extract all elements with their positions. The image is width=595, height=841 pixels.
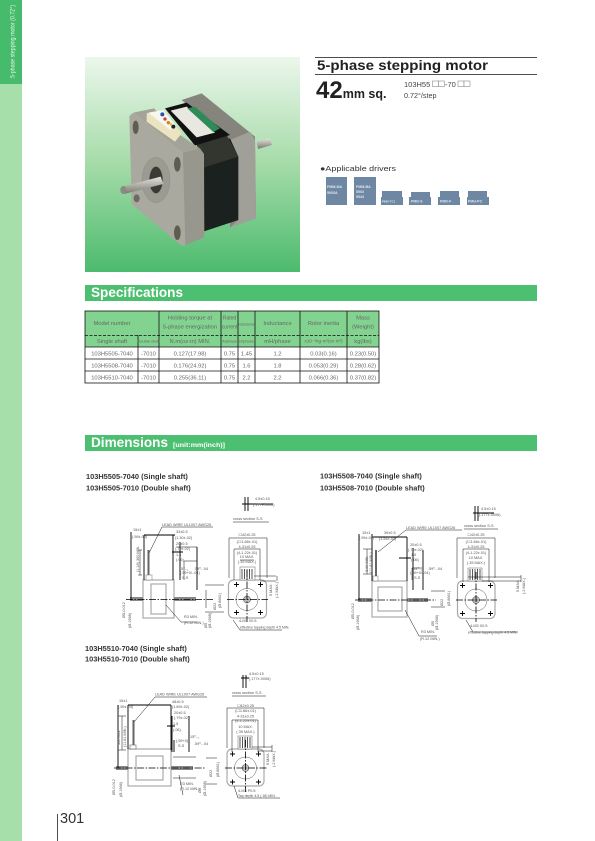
drawing: 103H5510 [112,672,280,798]
drawing: 103H5505: (.79±.02) [175,547,191,551]
model heading: 103H5508: 103H5508-7040 (Single shaft) [320,472,422,480]
front view: (4-1.22±.01) [235,719,257,723]
driver icons: PMD-S [411,200,423,204]
drawing: 103H5508: S-S [414,576,421,580]
specifications table: mH/phase [264,339,291,345]
drawing: 103H5505: (Ø.8661) [218,592,222,608]
drawing: 103H5508 [351,506,526,641]
drawing: 103H5508: (11.81 MIN.) [369,551,373,573]
front view: (.39 MAX.) [238,560,257,564]
driver icons: PMD-TC1 [382,200,396,204]
specifications table: 0.75 [224,376,235,382]
drawing: 103H5510: 15±1 [119,699,127,703]
drawing: 103H5510: LEAD WIRE UL1007 AWG26 [155,692,204,696]
drawing: 103H5508: 3.00 MIN. [365,556,369,572]
front view: 4-M3 X0.5 [239,619,257,623]
drawing: 103H5505: Ø22 [213,603,217,610]
specifications table: -7010 [141,352,156,358]
motor illustration [120,93,272,246]
specifications table: Ω/phase [239,338,255,344]
model code: -70 [445,80,456,89]
front view: 4-M3 X0.5 [470,624,488,628]
drawing: 103H5510: Ø5-0.012 [112,779,116,795]
specifications table: 0.75 [224,352,235,358]
drawing: 103H5508: (.59+0/-.04) [410,571,430,575]
front view: (☐1.66±.01) [466,540,487,544]
front view: 4-31±0.25 [238,545,256,549]
specifications table: 2.2 [242,376,251,382]
drawing: 103H5508: (Ø.8661) [447,590,451,606]
dimensions heading: [unit:mm(inch)] [173,442,225,449]
specifications table: 0.28(0.62) [350,364,376,370]
sidebar [0,0,22,841]
drawing: 103H5510: (11.81 MIN.) [123,725,127,747]
drawing: 103H5510: Ø22 [209,770,213,777]
front view: (.39 MAX.) [236,730,255,734]
specifications table: 0.127(17.98) [174,352,207,358]
specifications table: N.m(oz-in) MIN. [170,339,211,345]
specifications table: 103H5508-7040 [91,364,133,370]
front view: (☐1.66±.01) [237,540,258,544]
specifications table: 1.45 [241,352,252,358]
specifications table: kg(lbs) [354,339,372,345]
drawing: 103H5505: .59⁰₋.04 [194,567,208,571]
drawing: 103H5508: (.59±.04) [359,536,375,540]
drawing: 103H5508: 15⁰₋₁ [413,567,423,571]
specifications table: 1.8 [273,364,282,370]
specifications table: Mass [356,316,370,322]
cross section: (.177±.0006) [479,513,501,517]
front view: ☐42±0.25 [467,533,485,537]
drawing: 103H5508: (.79±.02) [408,548,424,552]
model code: 103H55 [404,80,430,89]
specifications table: Single shaft [97,339,128,345]
page number: 301 [60,811,84,827]
driver icons [326,177,489,205]
front view: 4-M3 P0.5 [238,789,256,793]
front view: 5 MAX. [516,580,520,592]
driver icons: 5503 [356,190,364,194]
specifications table: 0.255(36.11) [174,376,206,382]
applicable drivers heading: ●Applicable drivers [320,164,396,173]
drawing: 103H5508: (Ø.1968) [435,614,439,630]
dimensions heading: Dimensions [91,434,168,450]
drawing: 103H5508: R3 MIN. [421,630,435,634]
drawing: 103H5505: (1.18) 300 MIN. [136,546,140,572]
front view: 4-31±0.25 [237,714,254,718]
front view: (.2 MAX.) [522,577,526,594]
specifications table: (Weight) [352,324,374,330]
front view: ☐42±0.25 [238,533,256,537]
drawing: 103H5505: (.59+0/-.04) [180,571,200,575]
drawing: 103H5505: Ø5-0.012 [122,602,126,618]
specifications table: 0.03(0.16) [310,352,337,358]
model heading: 103H5510: 103H5510-7040 (Single shaft) [85,644,187,653]
cross section [233,497,275,522]
front view: 4-31±0.25 [467,545,485,549]
front view [227,533,289,630]
specifications table: 0.053(0.29) [309,364,338,370]
cross section [232,672,271,696]
cross section: (.177±.0006) [253,503,275,507]
driver icons: PMU-PC [468,200,483,204]
specifications table: Holding torque at [168,316,212,322]
drawing: 103H5508: (.06) [411,558,420,562]
drawing: 103H5508: Ø22 [440,599,444,606]
specifications heading: Specifications [91,284,183,300]
cross section: cross section S-S [464,524,494,528]
specifications table: 103H5505-7040 [91,352,133,358]
specifications table: Inductance [263,321,292,327]
model code [404,80,470,89]
product photo panel [85,57,300,272]
specifications table: -7010 [141,364,156,370]
drawing: 103H5510: 300 MIN. [117,730,121,745]
cross section: cross section S-S [233,517,263,521]
cross section [464,506,501,529]
drawing: 103H5505: LEAD WIRE UL1007 AWG26 [162,523,211,527]
drawing: 103H5505: (.06) [176,558,185,562]
drawing: 103H5508: LEAD WIRE UL1007 AWG26 [406,526,455,530]
specifications table: -7010 [141,376,156,382]
front view: 10 MAX. [469,556,483,560]
drawing: 103H5510: R3 MIN. [180,782,194,786]
model heading: 103H5505: 103H5505-7010 (Double shaft) [86,484,191,492]
specifications table: Double shaft [137,338,161,344]
drawing: 103H5510: (Ø.8661) [216,761,220,777]
drawing: 103H5510: (Ø.1968) [203,780,207,796]
drawing: 103H5505: R3 MIN. [184,615,198,619]
drawing: 103H5505: (Ø.1968) [128,612,132,628]
specifications table: 0.37(0.82) [350,376,376,382]
drawing: 103H5510: 1.5 [173,722,178,726]
front view [225,704,280,798]
drawing: 103H5505: Ø5 [204,623,208,628]
front view: (☐1.66±.01) [235,709,257,713]
drawing: 103H5510: (.59±.04) [118,705,134,709]
drawing: 103H5508: 20±0.5 [410,543,422,547]
drawing: 103H5510: 20±0.5 [174,711,186,715]
driver icons: PMD-F [440,200,452,204]
specifications table: current [222,324,238,330]
front view [456,533,526,634]
drawing: 103H5505 [122,497,289,630]
front view: (.2 MAX.) [275,581,279,598]
specifications table [85,311,379,383]
drawing: 103H5510: Ø5 [198,788,202,793]
specifications table: 1.6 [242,364,251,370]
drawing: 103H5508: 15±1 [362,531,370,535]
drawing: 103H5505: 15±1 [133,528,141,532]
drawing: 103H5510: (R.12 MIN.) [180,787,200,791]
specifications table: Rated [223,316,236,322]
model heading: 103H5505: 103H5505-7040 (Single shaft) [86,472,188,481]
drawing: 103H5505: (Ø.1968) [208,612,212,628]
specifications table: 0.23(0.50) [350,352,376,358]
cross section: cross section S-S [232,691,262,695]
front view: 5 MAX. [266,753,270,765]
front view: Tap depth 4.5 (.18) MIN. [238,794,276,798]
drawing: 103H5508: (Ø.1968) [356,614,360,630]
front view: 10 MAX. [238,725,253,729]
specifications table: A/phase [222,338,238,344]
drawing: 103H5510: (.79±.02) [174,716,190,720]
drawing: 103H5510: .59⁰₋.04 [194,742,208,746]
specifications table: 103H5510-7040 [91,376,133,382]
drawing: 103H5510: 15⁰₋₁ [190,735,200,739]
drawing: 103H5508: .59⁰₋.04 [428,567,442,571]
cross section: 4.5±0.15 [481,507,496,511]
specifications table: 0.75 [224,364,235,370]
drawing: 103H5505: (1.30±.02) [175,536,193,540]
drawing: 103H5510: (.59+0) [176,739,189,743]
front view: (4-1.22±.01) [237,551,258,555]
drawing: 103H5510: (Ø.1968) [119,781,123,797]
title: 5-phase stepping motor [317,58,489,73]
front view: ☐42±0.25 [237,704,254,708]
specifications table: Rotor inertia [308,321,340,327]
front view: (4-1.22±.01) [466,551,487,555]
drawing: 103H5505: 33±0.5 [176,530,188,534]
driver icons: PMM-BA [356,185,371,189]
drawing: 103H5508: (1.54±.02) [379,537,397,541]
drawing: 103H5510: 48±0.5 [172,700,184,704]
specifications table: 2.2 [273,376,282,382]
driver icons: PMM-MA [327,185,343,189]
frame size: 42mm sq. [316,77,386,104]
cross section: 4.5±0.15 [249,672,264,676]
drawing: 103H5508: Ø5 [431,621,435,626]
specifications table: 0.066(0.36) [309,376,338,382]
front view: (.39 MAX.) [467,561,486,565]
specifications table: 5-phase energization [163,324,217,330]
specifications table: 1.2 [273,352,282,358]
drawing: 103H5505: 20±0.5 [176,542,188,546]
drawing: 103H5505: (.59±.04) [132,535,148,539]
drawing: 103H5510: S-S [178,744,185,748]
cross section: 4.5±0.15 [255,497,270,501]
drawing: 103H5508: 39±0.5 [384,531,396,535]
model heading: 103H5510: 103H5510-7010 (Double shaft) [85,654,190,664]
front view: effective tapping depth 4.5 MIN. [468,630,517,634]
specifications heading [85,284,537,301]
drawing: 103H5505: S-S [182,576,189,580]
model heading: 103H5508: 103H5508-7010 (Double shaft) [320,484,425,492]
drawing: 103H5508: 1.5 [411,553,416,557]
drawing: 103H5508: (R.12 MIN.) [420,637,440,641]
driver icons: 5543 [356,195,364,199]
specifications table: resistance [238,322,255,326]
drawing: 103H5510: (.06) [173,728,182,732]
specifications table: 0.176(24.92) [174,364,207,370]
dimensions heading [85,434,537,451]
drawing: 103H5508: Ø5-0.012 [351,603,355,619]
step angle: 0.72°/step [404,91,436,100]
drawing: 103H5505: 15⁰₋₁ [179,567,189,571]
front view: 10 MAX. [240,555,254,559]
cross section: (.177±.0006) [249,677,271,681]
front view: effective tapping depth 4.5 MIN. [240,626,289,630]
driver icons: 5003A [327,191,338,195]
specifications table: Model number [93,321,131,327]
drawing: 103H5510: (1.89±.02) [172,705,190,709]
front view: (.2 MAX.) [272,750,276,767]
page number [58,811,84,841]
front view: 5 MAX. [269,584,273,596]
drawing: 103H5505: 1.5 [176,553,181,557]
drawing: 103H5505: (R.12 MIN.) [184,621,204,625]
specifications table: x10⁻⁴kg·m²(oz·in²) [304,338,343,344]
